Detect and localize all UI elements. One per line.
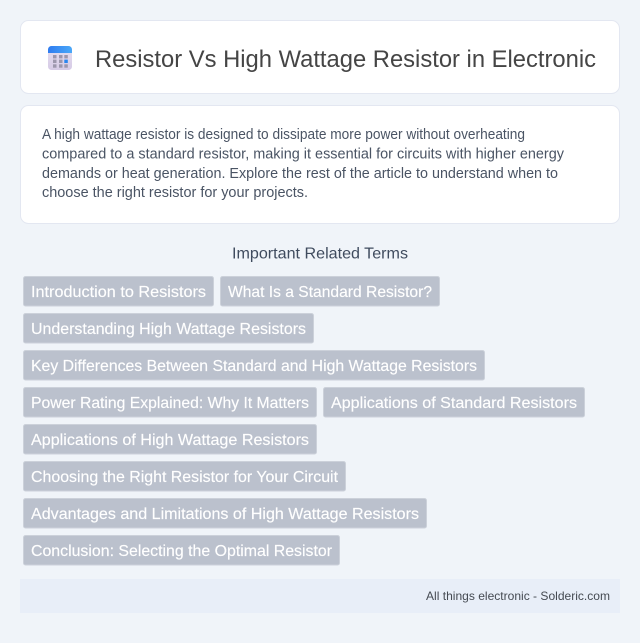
- tag: applications standard: Applications of Standard Resistors: [331, 395, 577, 412]
- tag: applications standard: [324, 388, 584, 417]
- tag: introduction: [24, 276, 214, 306]
- tag: applications high wattage: Applications of High Wattage Resistors: [31, 432, 309, 449]
- text block: description: compared to a standard resistor, making it essential for circuits with higher energy: [42, 146, 565, 162]
- tag: standard resistor: [220, 276, 440, 306]
- panel: header: [20, 20, 620, 94]
- tag: understanding: Understanding High Wattage Resistors: [31, 321, 306, 338]
- text block: description: A high wattage resistor is designed to dissipate more power without overheating: [42, 127, 525, 143]
- tag: conclusion: Conclusion: Selecting the Optimal Resistor: [31, 543, 333, 560]
- heading: related terms: Important Related Terms: [232, 246, 408, 262]
- tag: choosing: [24, 462, 346, 491]
- icon: calendar: [48, 46, 72, 70]
- text block: description: [42, 127, 565, 201]
- tag: advantages: [24, 498, 426, 528]
- tag: key differences: [24, 350, 484, 380]
- tag: applications high wattage: [24, 424, 316, 454]
- tag: introduction: Introduction to Resistors: [31, 284, 206, 301]
- text block: description: choose the right resistor for your projects.: [42, 185, 308, 201]
- title: Resistor Vs High Wattage Resistor in Electronic: [95, 46, 596, 73]
- panel: term tags: [24, 276, 584, 565]
- tag: advantages: Advantages and Limitations of High Wattage Resistors: [31, 506, 419, 523]
- tag: power rating: [24, 388, 316, 417]
- tag: standard resistor: What Is a Standard Resistor?: [228, 284, 432, 301]
- tag: conclusion: [24, 536, 340, 565]
- tag: power rating: Power Rating Explained: Why It Matters: [31, 395, 309, 412]
- text block: description: demands or heat generation. Explore the rest of the article to understand when to: [42, 166, 558, 182]
- footer text: All things electronic - Solderic.com: [426, 589, 610, 603]
- tag: choosing: Choosing the Right Resistor for Your Circuit: [31, 469, 339, 486]
- tag: key differences: Key Differences Between Standard and High Wattage Resistors: [31, 358, 477, 375]
- panel: description: [20, 106, 620, 224]
- tag: understanding: [24, 314, 314, 343]
- footer: [20, 579, 620, 613]
